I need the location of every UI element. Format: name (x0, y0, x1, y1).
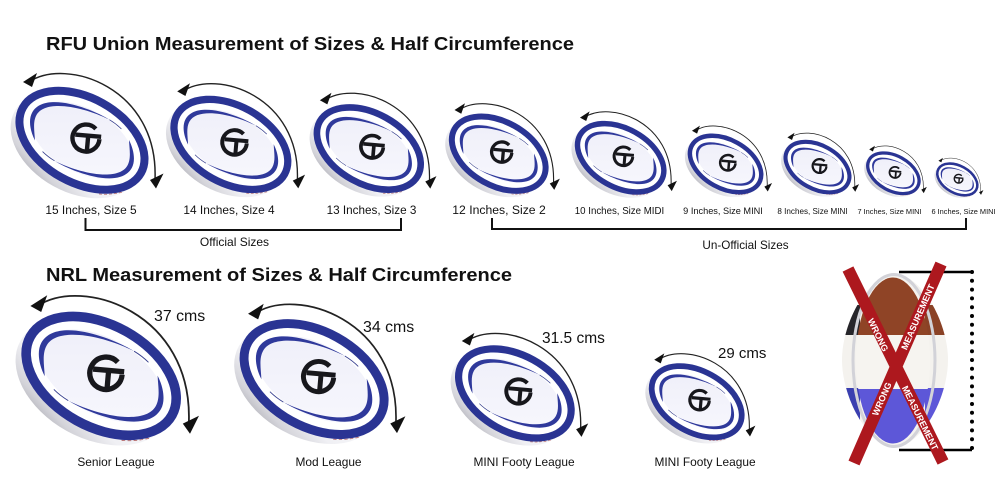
red cross (848, 264, 943, 463)
ball: 6 inches size mini (929, 157, 996, 216)
label: un-official sizes: Un-Official Sizes (702, 239, 789, 252)
ball: 7 inches size mini: 7 Inches, Size MINI (857, 207, 922, 216)
ball: 12 inches size 2 (431, 101, 560, 217)
ball: mini footy league 29 cms: 29 cms (718, 345, 766, 362)
red cross: MEASUREMENT (899, 282, 937, 351)
ball: 10 inches size midi: 10 Inches, Size MIDI (575, 206, 664, 217)
heading: RFU Union sizes: RFU Union Measurement of Sizes & Half Circumference (46, 33, 574, 54)
ball: mod league 34 cms: Mod League (295, 455, 362, 469)
heading: NRL sizes: NRL Measurement of Sizes & Half Circumference (46, 264, 512, 285)
ball: 13 inches size 3 (294, 90, 436, 217)
bracket: un-official sizes (492, 218, 966, 229)
red cross: WRONG (870, 381, 894, 417)
ball: senior league 37 cms: Senior League (77, 455, 155, 469)
ball: mod league 34 cms: 34 cms (363, 319, 414, 336)
ball: 9 inches size mini (674, 124, 772, 216)
ball: mini footy league 31.5 cms (434, 330, 605, 469)
ball: 15 inches size 5 (0, 70, 164, 220)
ball: 10 inches size midi (559, 109, 677, 217)
ball: senior league 37 cms (0, 291, 205, 472)
ball: 14 inches size 4: 14 Inches, Size 4 (183, 203, 275, 217)
red cross: MEASUREMENT (900, 384, 940, 452)
ball: 8 inches size mini: 8 Inches, Size MINI (777, 207, 848, 216)
ball: mini footy league 31.5 cms: 31.5 cms (542, 330, 605, 347)
label: official sizes: Official Sizes (200, 235, 269, 249)
ball: mod league 34 cms (213, 300, 414, 469)
ball: mini footy league 29 cms (632, 345, 766, 469)
bracket: official sizes (86, 218, 401, 230)
ball: mini footy league 29 cms: MINI Footy League (654, 455, 756, 469)
ball: 14 inches size 4 (149, 80, 305, 217)
ball: 15 inches size 5: 15 Inches, Size 5 (45, 203, 137, 217)
ball: mini footy league 31.5 cms: MINI Footy League (473, 455, 575, 469)
ball: 7 inches size mini (856, 144, 927, 216)
red cross: WRONG (866, 317, 890, 353)
ball: 12 inches size 2: 12 Inches, Size 2 (452, 203, 546, 217)
ball: 13 inches size 3: 13 Inches, Size 3 (327, 204, 416, 217)
ball: senior league 37 cms: 37 cms (154, 308, 205, 325)
ball: 8 inches size mini (772, 131, 859, 216)
ball: 6 inches size mini: 6 Inches, Size MINI (931, 207, 996, 216)
diagram: wrong measurement (840, 264, 972, 463)
bracket: measurement span (899, 272, 972, 450)
ball: 9 inches size mini: 9 Inches, Size MINI (683, 206, 763, 216)
